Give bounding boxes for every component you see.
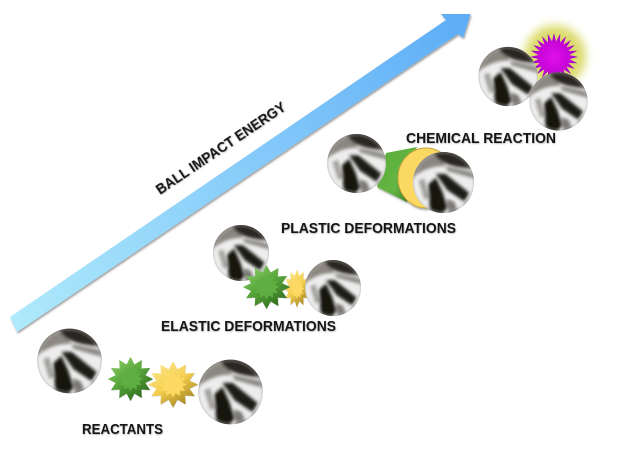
label: elastic deformations: ELASTIC DEFORMATIONS <box>161 318 336 335</box>
ball: plastic right <box>409 148 478 217</box>
ball: chemical left <box>475 43 541 110</box>
shape: green flattened reactant <box>377 147 417 202</box>
ball: chemical right <box>526 69 591 134</box>
starburst: product <box>530 33 578 81</box>
stage: plastic deformations <box>281 130 478 237</box>
axis label: ball impact energy: BALL IMPACT ENERGY <box>153 99 289 198</box>
ball: reactants right <box>194 356 267 428</box>
stage: elastic deformations <box>161 222 364 335</box>
ball: reactants left <box>33 325 106 397</box>
ball: elastic right <box>302 256 364 320</box>
label: chemical reaction: CHEMICAL REACTION <box>406 130 556 147</box>
label: plastic deformations: PLASTIC DEFORMATIONS <box>281 220 456 237</box>
star: yellow squashed <box>284 270 310 308</box>
ball: elastic top <box>210 222 272 284</box>
star: green reactant <box>108 357 153 401</box>
stage: reactants <box>33 325 267 438</box>
stage: chemical reaction <box>406 19 592 147</box>
ball: plastic left <box>323 130 390 197</box>
label: reactants: REACTANTS <box>82 421 163 438</box>
star: yellow reactant <box>148 362 198 408</box>
shape: yellow flattened reactant <box>398 148 454 208</box>
star: green squashed <box>243 265 290 309</box>
glow: reaction <box>518 19 592 93</box>
arrow: ball impact energy <box>10 14 470 332</box>
